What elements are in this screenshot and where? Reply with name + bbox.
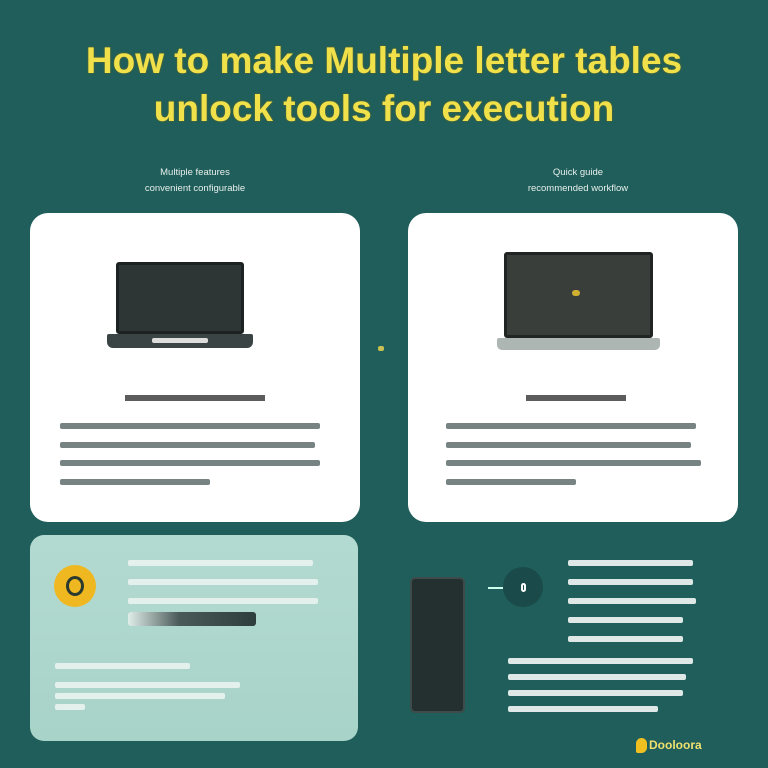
icon: laptop left [107,262,253,348]
subtitle right: Quick guide [553,167,603,178]
connector dot [378,346,384,351]
panel: left card [30,213,360,522]
logo: Dooloora [649,738,702,752]
icon: dark phone [410,577,465,713]
title line 1: How to make Multiple letter tables [86,40,682,81]
text block right [446,395,701,485]
text block right bottom [508,658,693,712]
icon: yellow circle [54,565,96,607]
text block steps [128,560,318,604]
subtitle right: recommended workflow [528,183,628,194]
subtitle left: convenient configurable [145,183,245,194]
progress bar [128,612,256,626]
panel: bottom-left light [30,535,358,741]
subtitle left: Multiple features [160,167,230,178]
subtitle right [528,167,628,194]
icon: ring with connector [488,567,543,607]
panel: right card [408,213,738,522]
text block notes [55,663,240,710]
icon: laptop right [497,252,660,350]
title line 2: unlock tools for execution [154,88,614,129]
text block left [60,395,320,485]
text block right top [568,560,696,642]
subtitle left [145,167,245,194]
